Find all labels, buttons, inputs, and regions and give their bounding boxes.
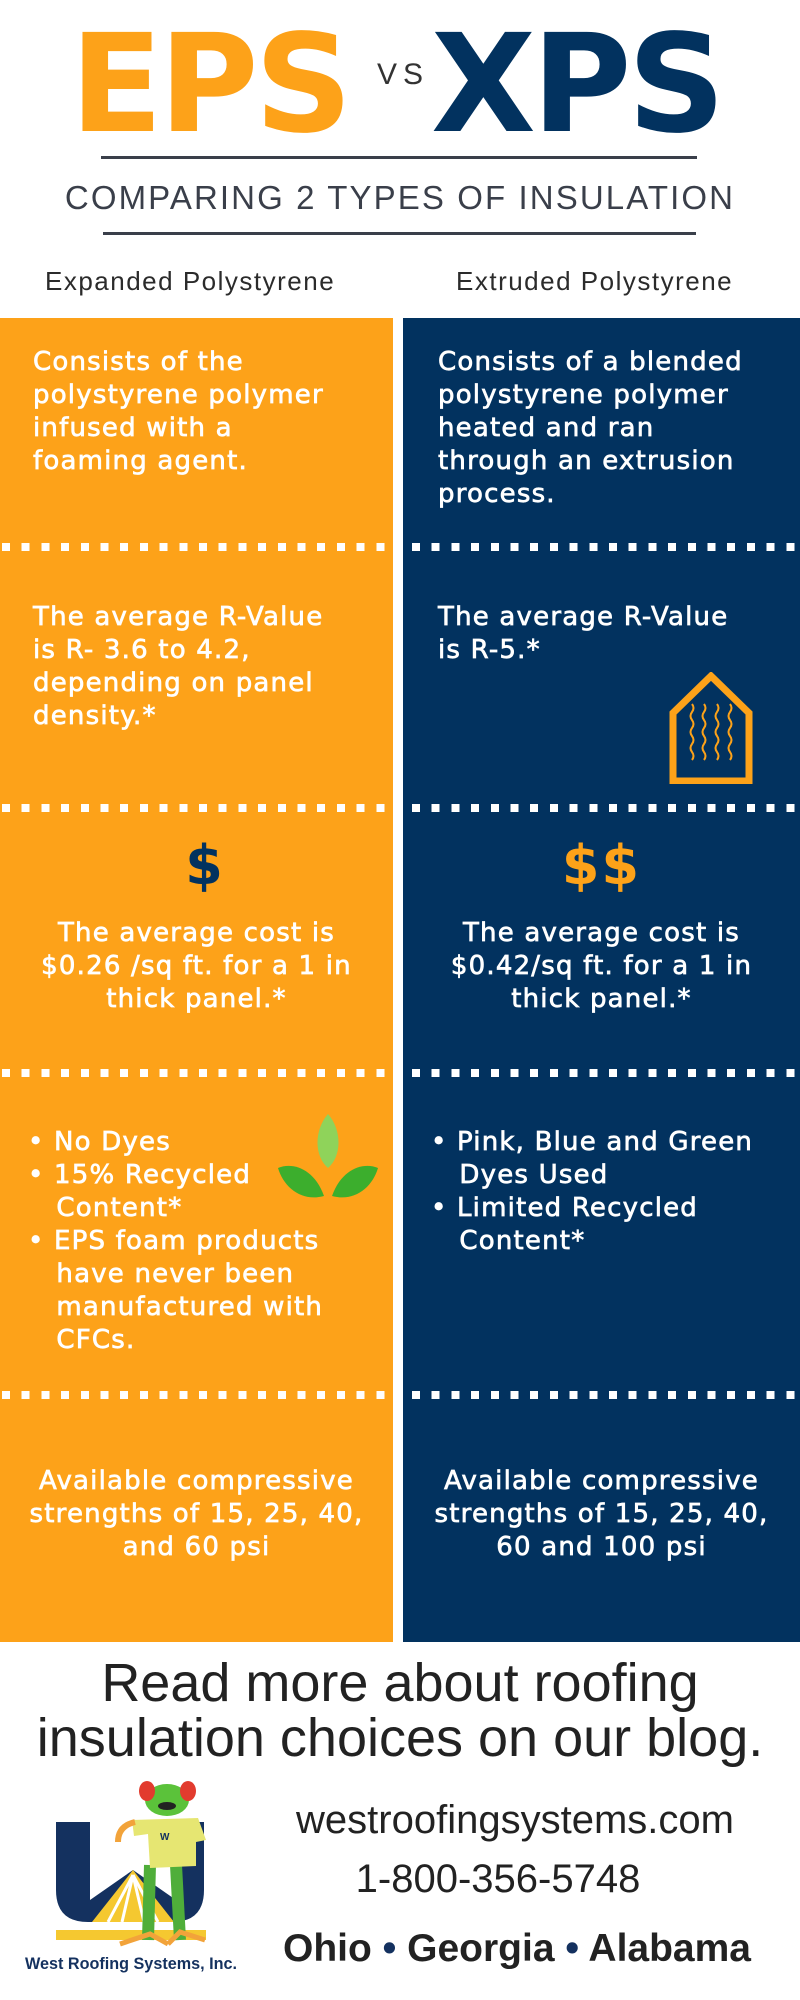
text: XPS R-value: is R-5.* <box>438 635 541 665</box>
title: EPS: EPS <box>70 6 349 164</box>
text: EPS composition: foaming agent. <box>33 446 248 476</box>
text: EPS R-value <box>32 602 323 731</box>
text: XPS R-value: The average R-Value <box>438 602 728 632</box>
text: EPS cost: $0.26 /sq ft. for a 1 in <box>41 951 352 981</box>
text: XPS cost: thick panel.* <box>511 984 692 1014</box>
footer: blog call to action <box>37 1653 763 1768</box>
panel: EPS column <box>0 318 393 1642</box>
panel: XPS column <box>403 318 800 1642</box>
icon: single dollar: $ <box>185 834 223 897</box>
footer: phone: 1-800-356-5748 <box>356 1857 640 1901</box>
subtitle: COMPARING 2 TYPES OF INSULATION <box>65 179 735 216</box>
text: XPS composition: heated and ran <box>438 413 654 443</box>
heading: Extruded Polystyrene: Extruded Polystyrene <box>456 266 733 296</box>
text: EPS composition: Consists of the <box>33 347 244 377</box>
logo: West Roofing Systems <box>25 1781 237 1973</box>
logo: West Roofing Systems: W <box>160 1832 170 1843</box>
heading: Expanded Polystyrene: Expanded Polystyrene <box>45 266 335 296</box>
text: XPS compressive strengths: strengths of 15, 25, 40, <box>434 1499 769 1529</box>
text: EPS cost: The average cost is <box>58 918 335 948</box>
text: EPS composition <box>33 347 324 476</box>
list: EPS features: Content* <box>56 1193 182 1223</box>
text: EPS cost: thick panel.* <box>106 984 287 1014</box>
list: EPS features <box>28 1127 323 1355</box>
text: XPS composition: polystyrene polymer <box>438 380 729 410</box>
title <box>70 6 721 164</box>
text: EPS compressive strengths: and 60 psi <box>123 1532 270 1562</box>
text: XPS composition: Consists of a blended <box>438 347 743 377</box>
footer: blog call to action: Read more about roofing <box>101 1653 699 1713</box>
text: EPS composition: polystyrene polymer <box>33 380 324 410</box>
text: XPS composition: through an extrusion <box>438 446 735 476</box>
text: EPS compressive strengths: strengths of 15, 25, 40, <box>29 1499 364 1529</box>
list: EPS features: • EPS foam products <box>28 1226 319 1256</box>
icon: double dollar: $$ <box>562 834 641 897</box>
icon: leaves <box>278 1114 378 1198</box>
list: XPS features: • Pink, Blue and Green <box>431 1127 753 1157</box>
list: EPS features: have never been <box>56 1259 294 1289</box>
list: EPS features: • 15% Recycled <box>28 1160 251 1190</box>
list: EPS features: • No Dyes <box>28 1127 171 1157</box>
text: XPS cost: $0.42/sq ft. for a 1 in <box>451 951 752 981</box>
list: XPS features: • Limited Recycled <box>431 1193 698 1223</box>
text: XPS cost: The average cost is <box>463 918 740 948</box>
footer: website: westroofingsystems.com <box>296 1798 734 1842</box>
text: EPS compressive strengths <box>29 1466 364 1562</box>
text: XPS composition <box>438 347 743 509</box>
footer: locations: Ohio • Georgia • Alabama <box>283 1927 751 1970</box>
icon: insulated house <box>670 672 752 784</box>
title: XPS: XPS <box>431 6 721 164</box>
title: vs: VS <box>377 58 429 91</box>
text: XPS R-value <box>438 602 728 665</box>
list: XPS features: Content* <box>459 1226 585 1256</box>
list: XPS features <box>431 1127 753 1256</box>
text: EPS R-value: The average R-Value <box>33 602 323 632</box>
text: EPS composition: infused with a <box>33 413 233 443</box>
text: EPS R-value: is R- 3.6 to 4.2, <box>33 635 251 665</box>
text: EPS R-value: density.* <box>33 701 157 731</box>
text: EPS cost <box>41 918 352 1014</box>
text: XPS compressive strengths <box>434 1466 769 1562</box>
list: XPS features: Dyes Used <box>459 1160 608 1190</box>
text: XPS compressive strengths: 60 and 100 psi <box>496 1532 707 1562</box>
text: XPS composition: process. <box>438 479 556 509</box>
text: EPS R-value: depending on panel <box>33 668 314 698</box>
list: EPS features: manufactured with <box>56 1292 323 1322</box>
footer: blog call to action: insulation choices on our blog. <box>37 1708 763 1768</box>
logo: West Roofing Systems: West Roofing Systems, Inc. <box>25 1954 237 1973</box>
text: XPS compressive strengths: Available compressive <box>444 1466 759 1496</box>
text: XPS cost <box>451 918 752 1014</box>
list: EPS features: CFCs. <box>56 1325 135 1355</box>
text: EPS compressive strengths: Available compressive <box>39 1466 354 1496</box>
